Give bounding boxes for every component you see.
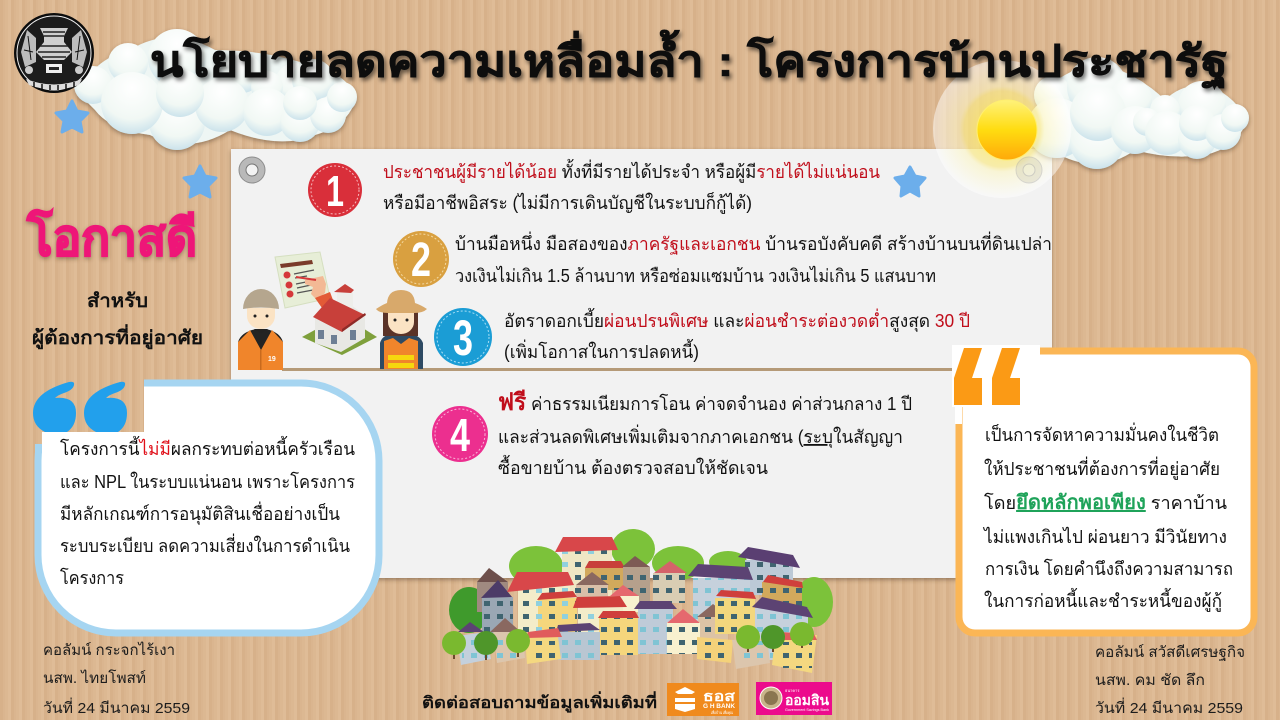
callout text: โครงการนี้ไม่มีผลกระทบต่อหนี้ครัวเรือน (60, 436, 355, 459)
item 1 badge: 1 (326, 167, 344, 216)
callout text: และ NPL ในระบบแน่นอน เพราะโครงการ (60, 471, 355, 492)
star: left lower (184, 166, 216, 197)
item 2 badge: 2 (411, 234, 431, 287)
callout text: การเงิน โดยคำนึงถึงความสามารถ (985, 558, 1233, 579)
front trees (442, 622, 814, 660)
icon: orange quote mark (954, 348, 1020, 405)
item 2 text: บ้านมือหนึ่ง มือสองของภาครัฐและเอกชน บ้านรอบังคับคดี สร้างบ้านบนที่ดินเปล่า (455, 231, 1052, 255)
source: left: คอลัมน์ กระจกไร้เงา (43, 641, 175, 659)
source: right: นสพ. คม ชัด ลึก (1095, 672, 1205, 689)
source: left: วันที่ 24 มีนาคม 2559 (43, 697, 190, 717)
worker: man (238, 289, 283, 370)
logo: Government Savings Bank: Government Savings Bank (785, 707, 829, 712)
worker: man: 19 (268, 356, 276, 363)
icon: blue quote mark (33, 382, 127, 432)
item 3 badge: 3 (453, 310, 473, 366)
house (302, 284, 377, 355)
callout text: ระบบระเบียบ ลดความเสี่ยงในการดำเนิน (60, 533, 350, 556)
logo: GH Bank: ธอส (703, 688, 736, 704)
source: right: วันที่ 24 มีนาคม 2559 (1095, 697, 1243, 717)
callout text: โดยยึดหลักพอเพียง ราคาบ้าน (984, 491, 1227, 514)
item 2 text (455, 231, 1052, 286)
item 1 badge (308, 163, 362, 217)
item 1 text: หรือมีอาชีพอิสระ (ไม่มีการเดินบัญชีในระบบก็กู้ได้) (383, 191, 752, 214)
checklist (275, 252, 330, 308)
buildings back (477, 537, 803, 633)
callout text: มีหลักเกณฑ์การอนุมัติสินเชื่ออย่างเป็น (60, 501, 340, 525)
item 2 badge (393, 231, 449, 287)
item 3 text (504, 308, 970, 362)
callout: right (952, 345, 1254, 633)
subheading (32, 291, 203, 350)
item 3 text: อัตราดอกเบี้ยผ่อนปรนพิเศษ และผ่อนชำระต่องวดต่ำสูงสุด 30 ปี (504, 308, 970, 332)
item 4 text: ซื้อขายบ้าน ต้องตรวจสอบให้ชัดเจน (498, 455, 768, 478)
subheading: ผู้ต้องการที่อยู่อาศัย (32, 324, 203, 350)
heading: opportunity (26, 208, 203, 350)
callout text: ให้ประชาชนที่ต้องการที่อยู่อาศัย (984, 456, 1220, 480)
title: นโยบายลดความเหลื่อมล้ำ : โครงการบ้านประชารัฐ (150, 29, 1228, 89)
logo: GH Bank: G H BANK (703, 704, 736, 710)
item 4 text: และส่วนลดพิเศษเพิ่มเติมจากภาคเอกชน (ระบุในสัญญา (498, 424, 903, 448)
logo: GH Bank: เพื่อบ้าน เพื่อคุณ (711, 710, 733, 716)
item 4 badge (432, 406, 488, 462)
item 1 text (383, 159, 880, 214)
item 4 badge: 4 (450, 409, 470, 461)
grommet: right (1016, 157, 1042, 183)
item 3 text: (เพิ่มโอกาสในการปลดหนี้) (504, 339, 699, 362)
logo: Government Savings Bank: ธนาคาร (785, 688, 800, 693)
cloud: left (74, 29, 357, 150)
subheading: สำหรับ (87, 291, 148, 312)
grommet: left (239, 157, 265, 183)
hand with pen (296, 276, 333, 308)
callout text (60, 436, 355, 588)
item 4 text: ฟรี ค่าธรรมเนียมการโอน ค่าจดจำนอง ค่าส่วนกลาง 1 ปี (498, 389, 912, 416)
source: right: คอลัมน์ สวัสดีเศรษฐกิจ (1095, 644, 1245, 661)
callout: left (28, 377, 379, 633)
callout text: ไม่แพงเกินไป ผ่อนยาว มีวินัยทาง (982, 526, 1227, 547)
logo: Government Savings Bank: ออมสิน (785, 692, 829, 708)
buildings mid (507, 564, 813, 660)
back trees (449, 529, 833, 633)
divider line (282, 368, 1052, 371)
cloud: right (1027, 57, 1249, 169)
illustration: workers and house (238, 252, 427, 370)
item 1 text: ประชาชนผู้มีรายได้น้อย ทั้งที่มีรายได้ประจำ หรือผู้มีรายได้ไม่แน่นอน (383, 159, 880, 183)
source: left (43, 641, 190, 717)
star: left top (56, 101, 88, 132)
sun with halo (933, 60, 1071, 198)
item 2 text: วงเงินไม่เกิน 1.5 ล้านบาท หรือซ่อมแซมบ้าน วงเงินไม่เกิน 5 แสนบาท (455, 265, 936, 286)
buildings front (457, 609, 817, 673)
callout text (982, 422, 1233, 612)
star: panel (895, 167, 925, 196)
item 4 text (498, 389, 912, 478)
panel: main paper (231, 149, 1052, 578)
source: right (1095, 644, 1245, 717)
illustration: town (442, 529, 833, 673)
logo: GH Bank (667, 683, 739, 716)
heading: opportunity: โอกาสดี (26, 208, 197, 266)
callout text: เป็นการจัดหาความมั่นคงในชีวิต (985, 422, 1219, 445)
worker: woman (376, 290, 427, 369)
footer contact text: ติดต่อสอบถามข้อมูลเพิ่มเติมที่ (422, 691, 657, 714)
logo: Government Savings Bank (756, 682, 832, 715)
item 3 badge (434, 308, 492, 366)
callout text: ในการก่อหนี้และชำระหนี้ของผู้กู้ (984, 588, 1222, 612)
callout text: โครงการ (60, 567, 124, 588)
government seal (14, 13, 94, 93)
source: left: นสพ. ไทยโพสท์ (43, 669, 146, 687)
